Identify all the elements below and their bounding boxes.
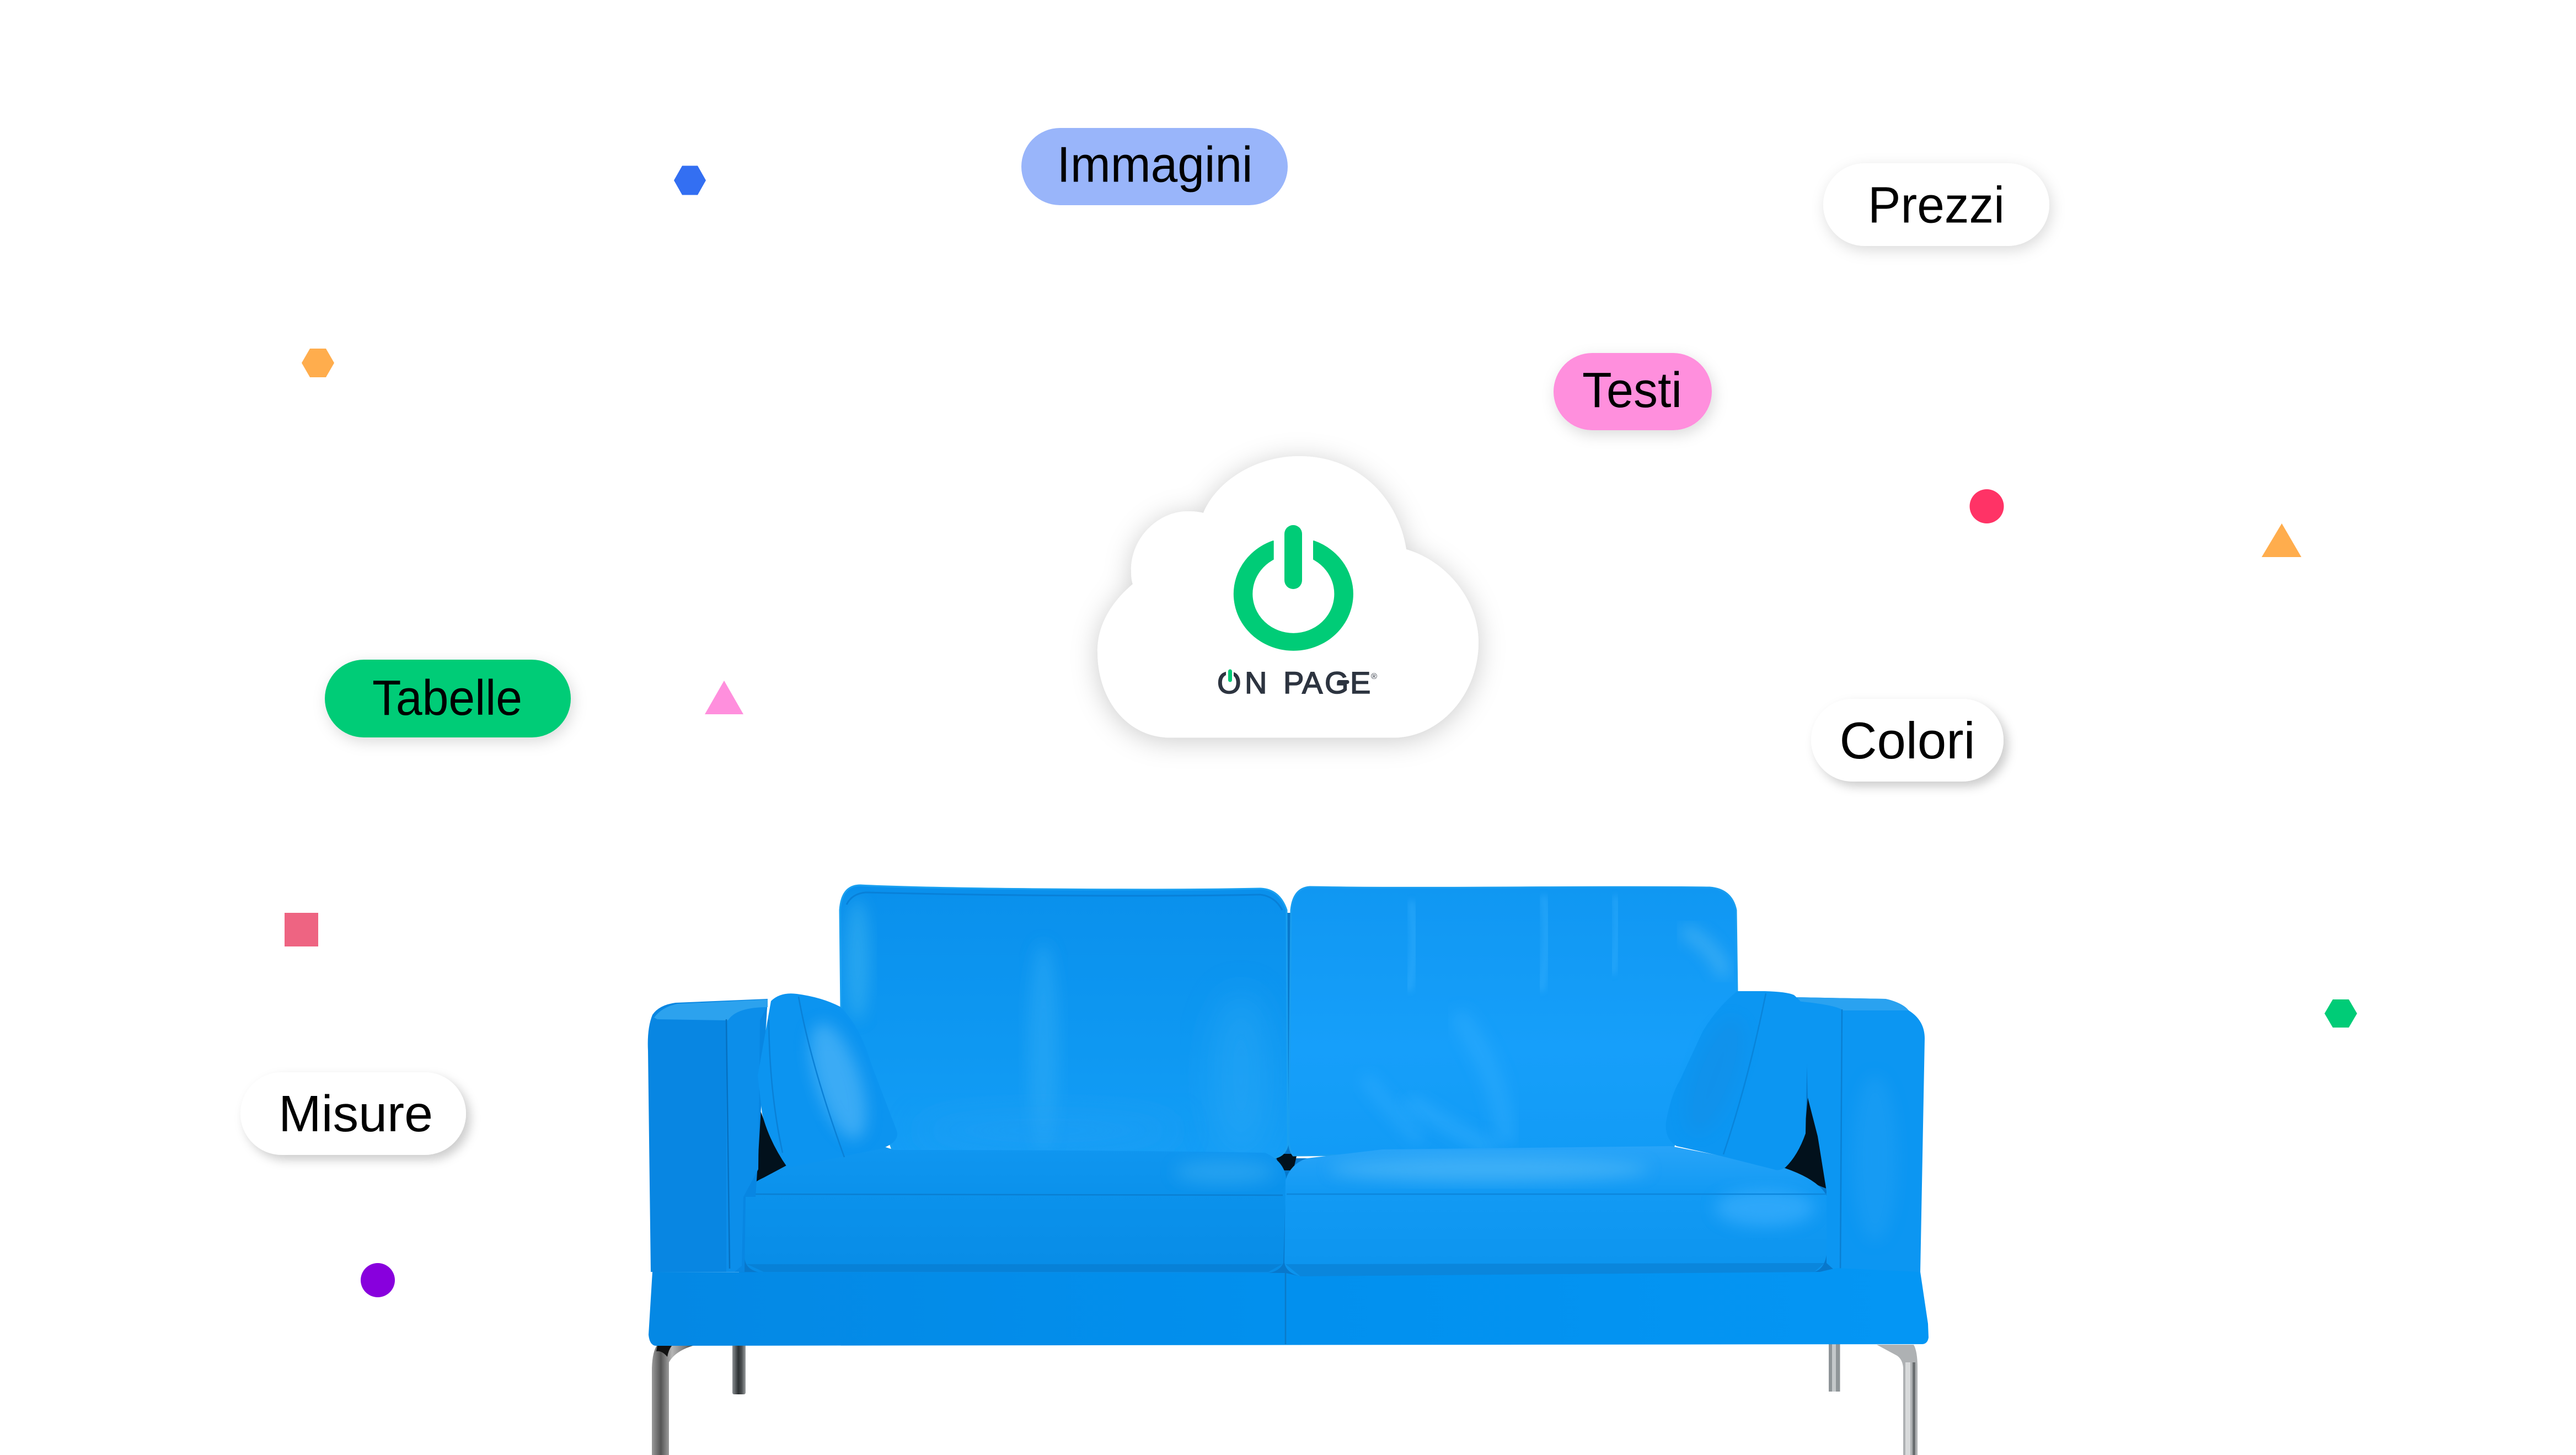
tag: Testi: Testi <box>1582 363 1682 418</box>
right back cushion <box>1289 887 1737 1156</box>
dark gaps <box>754 1095 1827 1189</box>
left seat cushion <box>745 1146 1286 1273</box>
left pillow <box>758 993 897 1168</box>
tag: Tabelle: Tabelle <box>372 671 522 726</box>
shape: red circle <box>1970 489 2004 523</box>
logotype: ON PAGE: ON PAGE <box>1217 665 1370 700</box>
cloud shape <box>1097 456 1479 738</box>
shape: orange triangle <box>2262 523 2301 557</box>
sofa base <box>649 1268 1929 1346</box>
shape: blue hexagon <box>674 165 706 195</box>
sofa <box>648 885 1929 1455</box>
cloud with On Page logo <box>1097 456 1479 738</box>
tag: Prezzi <box>1823 163 2049 246</box>
tag: Testi <box>1554 353 1712 430</box>
right pillow <box>1666 991 1808 1170</box>
tag: Misure <box>240 1072 466 1155</box>
tag: Prezzi: Prezzi <box>1868 176 2005 234</box>
sofa legs <box>652 1344 1918 1455</box>
shape: coral square <box>285 913 318 946</box>
right seat cushion <box>1284 1146 1827 1276</box>
tag: Tabelle <box>325 660 571 737</box>
tag: Immagini <box>1021 128 1288 205</box>
tag: Colori: Colori <box>1840 712 1975 769</box>
shape: orange hexagon <box>302 349 334 377</box>
icon: power symbol <box>1234 525 1353 650</box>
left back cushion <box>840 885 1288 1158</box>
logotype: ON PAGE: ® <box>1371 672 1377 681</box>
tag: Immagini: Immagini <box>1057 137 1253 193</box>
tag: Misure: Misure <box>279 1085 433 1142</box>
tag: Colori <box>1811 699 2004 782</box>
right armrest <box>1797 997 1925 1272</box>
sofa backing <box>739 913 1845 1279</box>
shape: purple circle <box>361 1263 395 1297</box>
left armrest <box>648 999 768 1272</box>
shape: green hexagon <box>2325 999 2357 1028</box>
shape: pink triangle <box>705 681 743 714</box>
